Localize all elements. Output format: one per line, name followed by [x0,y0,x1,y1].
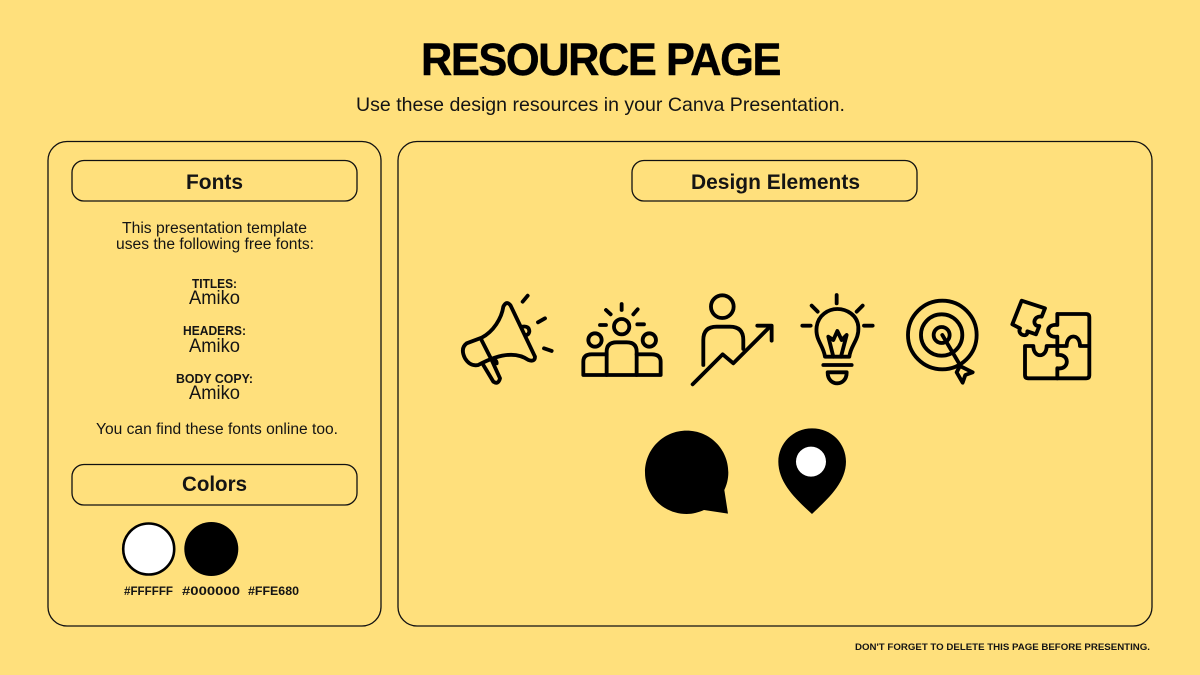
color swatch: white [123,524,174,574]
color swatch: black [184,522,238,576]
font entry: headers [183,324,246,357]
color labels: #FFFFFF [124,586,173,598]
font entry: headers: Amiko [189,336,240,357]
font entry: body copy [176,372,253,404]
title: RESOURCE PAGE [421,34,780,85]
icon: location pin [778,428,846,514]
font entry: titles: Amiko [189,288,240,309]
heading: colors: Colors [182,473,247,496]
text block: fonts intro [116,220,314,253]
icon: speech bubble [645,431,728,514]
panel: design elements [398,142,1152,626]
font entry: body copy: BODY COPY: [176,372,253,386]
icon: person with growth arrow [693,295,772,384]
icon: light bulb [802,295,873,383]
font entry: titles: TITLES: [192,277,237,291]
heading: design elements: Design Elements [691,171,860,194]
font entry: body copy: Amiko [189,383,240,404]
text block: fonts intro: This presentation template [122,220,307,237]
color labels: #FFE680 [248,586,299,598]
heading: design elements [632,160,917,201]
heading: colors [72,464,357,505]
icon: target with arrow [908,301,977,383]
subtitle: Use these design resources in your Canva Presentation. [356,94,845,116]
heading: fonts: Fonts [186,171,243,194]
icon: team [583,304,661,375]
text block: fonts note: You can find these fonts online too. [96,421,338,438]
footer note: DON'T FORGET TO DELETE THIS PAGE BEFORE PRESENTING. [855,642,1150,653]
panel: fonts and colors [48,142,381,626]
icon: megaphone [463,296,552,383]
icon: puzzle [1012,301,1089,378]
text block: fonts intro: uses the following free fonts: [116,236,314,253]
color labels: #000000 [182,586,240,598]
color labels [124,586,299,598]
panel outline [48,142,381,626]
panel outline [398,142,1152,626]
font entry: headers: HEADERS: [183,324,246,338]
heading: fonts [72,160,357,201]
font entry: titles [189,277,240,309]
